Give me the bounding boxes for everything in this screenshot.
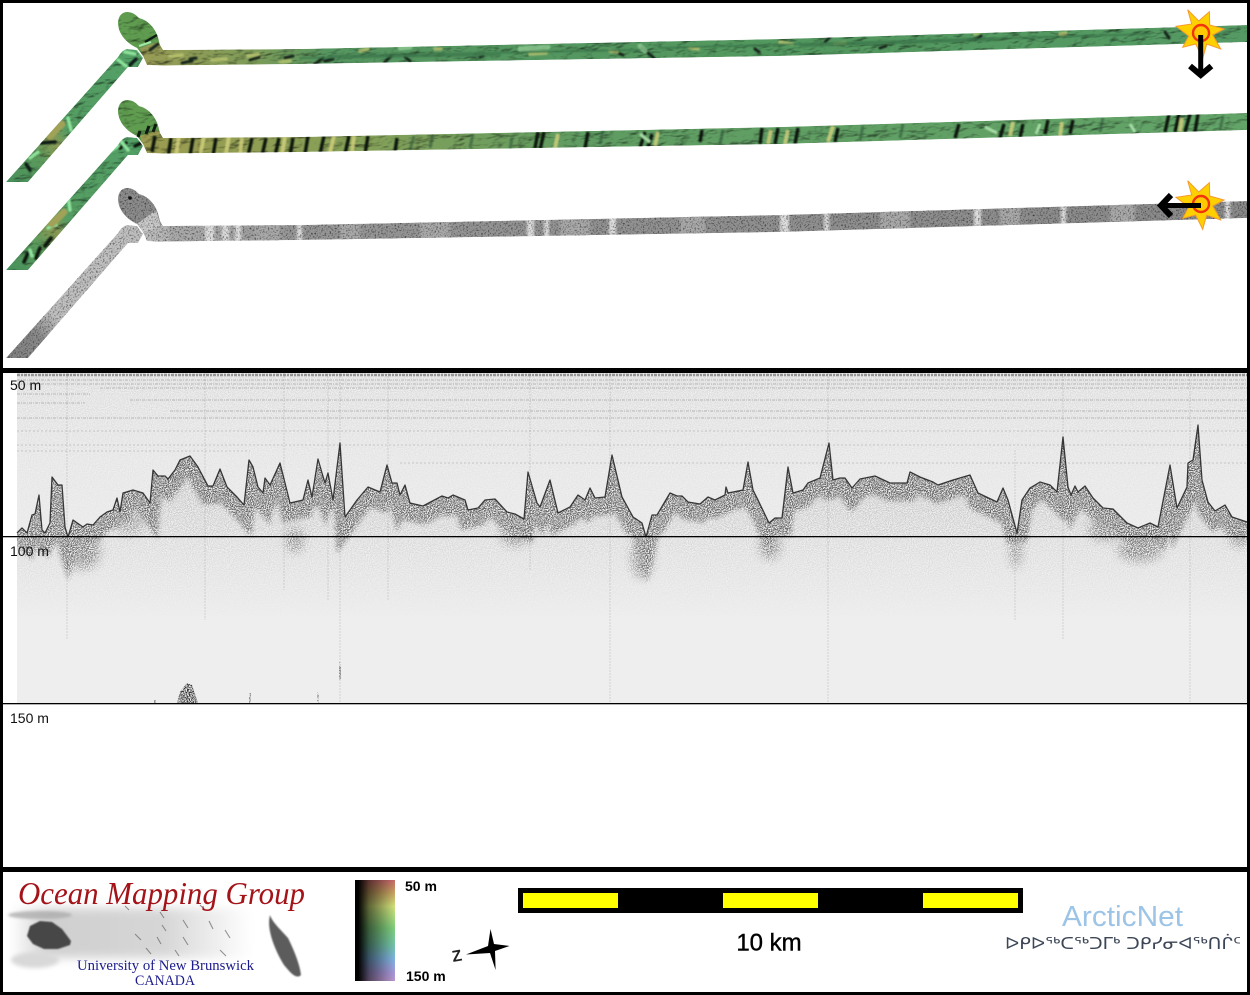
top depth label: 50 m <box>405 878 437 894</box>
strip: grey backscatter mosaic, third swath <box>6 188 1247 358</box>
echogram background <box>17 373 1247 703</box>
panel: sonar swath map strips <box>6 12 1247 358</box>
depth label 100 m: 100 m <box>10 543 49 559</box>
icon: explosion marker on first swath <box>1176 10 1224 58</box>
depth label 150 m: 150 m <box>10 710 49 726</box>
scale bar <box>518 888 1023 956</box>
logo dark vessel swath <box>269 915 301 977</box>
panel: sub-bottom profiler echogram <box>3 373 1250 726</box>
depth line 150 m <box>3 703 1247 704</box>
seabed echo and sub-bottom haze <box>17 431 1247 592</box>
logo seafloor marks <box>125 905 230 956</box>
scale label: 10 km <box>736 930 802 956</box>
depth label 50 m: 50 m <box>10 377 41 393</box>
logo: ArcticNet <box>1005 901 1241 953</box>
logo dark multibeam fan <box>27 921 71 949</box>
logo country text: CANADA <box>135 973 195 989</box>
logo grey seafloor background <box>10 908 265 958</box>
strip: shaded bathymetry, first swath <box>6 12 1247 182</box>
colour bar legend: depth <box>355 878 446 984</box>
Inuktitut syllabics wordmark: ᐅᑭᐅᖅᑕᖅᑐᒥᒃ ᑐᑭᓯᓂᐊᖅᑎᒌᑦ <box>1005 934 1241 953</box>
logo title text: Ocean Mapping Group <box>18 875 305 911</box>
depth line 100 m <box>3 536 1247 537</box>
ArcticNet wordmark: ArcticNet <box>1062 901 1183 933</box>
icon: north arrow compass: Z <box>451 947 464 966</box>
water column noise <box>17 373 1247 703</box>
arrow: leftward look direction <box>1161 195 1201 216</box>
seabed reflector line <box>17 425 1247 537</box>
icon: north arrow compass <box>451 929 510 970</box>
logo university text: University of New Brunswick <box>77 958 254 974</box>
bottom depth label: 150 m <box>406 968 446 984</box>
multiple echo at base of echogram <box>155 662 340 703</box>
strip: shaded bathymetry, second swath <box>6 100 1247 270</box>
icon: explosion marker on third swath <box>1176 181 1224 229</box>
arrow: downward look direction <box>1190 35 1211 75</box>
colour ramp <box>355 880 395 981</box>
logo: Ocean Mapping Group <box>8 875 305 989</box>
